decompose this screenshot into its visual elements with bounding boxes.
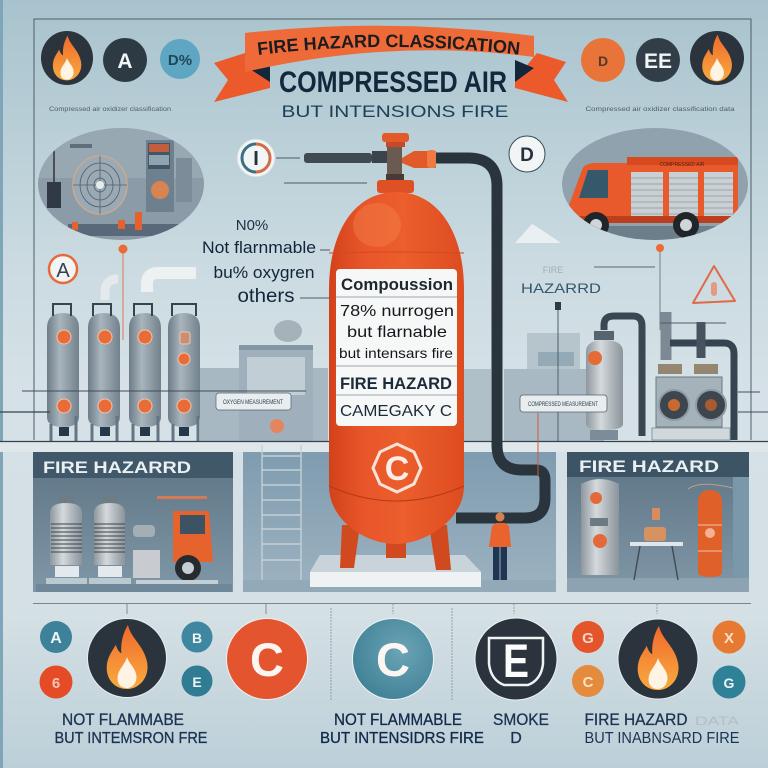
annotation: not flammable: N0% <box>236 217 268 234</box>
caption: fire hazard right: FIRE HAZARD <box>584 711 688 729</box>
small caption left: Compressed air oxidizer classification <box>49 107 171 113</box>
caption: smoke <box>493 711 549 747</box>
caption: not flammable left <box>54 711 208 747</box>
title ribbon: FIRE HAZARD CLASSICATION <box>258 34 520 55</box>
badge: class C teal <box>352 618 434 700</box>
icons: top left class badges: A <box>117 50 133 73</box>
panel: fire hazard room right <box>567 452 749 592</box>
badge: class E <box>475 618 557 700</box>
text: fire hazard annotation: HAZARRD <box>521 280 601 296</box>
legend: group A: 6 <box>52 675 60 692</box>
legend: group right: X <box>724 630 734 647</box>
composition label: but flarnable <box>347 324 447 341</box>
badge: I <box>237 139 275 177</box>
legend: group A: E <box>192 674 202 690</box>
badge: class E: E <box>503 634 529 687</box>
legend: group A: A <box>50 630 62 647</box>
icon: warning triangle <box>693 266 735 303</box>
legend: group right: C <box>583 674 594 691</box>
annotation: not flammable: bu% oxygren <box>214 263 314 282</box>
title: COMPRESSED AIR <box>279 66 507 99</box>
legend: group right <box>572 619 746 699</box>
panel: cylinder bank left: OXYGEN MEASUREMENT <box>223 400 283 406</box>
panel: compressor machinery right <box>464 244 768 442</box>
panel: centre bay with ladder <box>243 445 556 592</box>
composition label <box>336 269 457 426</box>
badge: D <box>509 136 545 172</box>
badge: class C orange: C <box>250 633 284 686</box>
person <box>489 512 511 580</box>
caption: fire hazard right: DATA <box>695 714 739 728</box>
text: fire hazard annotation: FIRE <box>543 265 563 275</box>
panel: machinery illustration <box>38 128 204 240</box>
legend: group A: B <box>192 630 202 646</box>
caption: not flammable left: BUT INTEMSRON FRE <box>54 730 208 747</box>
icons: top right class badges: EE <box>644 50 672 73</box>
subtitle: BUT INTENSIONS FIRE <box>282 102 508 121</box>
panel: fire hazard room left: FIRE HAZARRD <box>43 458 191 477</box>
caption: not flammable centre: BUT INTENSIDRS FIRE <box>320 730 484 747</box>
annotation: not flammable: Not flarnmable <box>202 238 316 257</box>
caption: smoke: SMOKE <box>493 711 549 729</box>
composition label: FIRE HAZARD <box>340 374 452 393</box>
composition label: but intensars fire <box>339 345 453 361</box>
panel: fire truck illustration: COMPRESSED AIR <box>659 162 705 168</box>
badge: D: D <box>520 145 534 166</box>
caption: smoke: D <box>510 730 522 747</box>
legend: group right: G <box>582 630 594 647</box>
composition label: 78% nurrogen <box>340 303 454 320</box>
base plate <box>310 525 481 587</box>
class C emblem: C <box>385 450 409 488</box>
badge: class C orange <box>226 618 308 700</box>
annotation: not flammable <box>202 217 336 307</box>
pipe and valve <box>276 133 545 518</box>
icons: top right class badges: D <box>598 53 608 69</box>
icons: top left class badges: D% <box>168 52 192 69</box>
title ribbon <box>214 26 568 121</box>
caption: fire hazard right: BUT INABNSARD FIRE <box>584 730 740 747</box>
divider lines <box>33 604 751 614</box>
icons: top right class badges <box>581 31 744 85</box>
panel: fire hazard room right: FIRE HAZARD <box>579 457 719 476</box>
panel: fire truck illustration <box>562 128 748 240</box>
composition label: CAMEGAKY C <box>340 403 452 420</box>
caption: not flammable centre: NOT FLAMMABLE <box>334 711 462 729</box>
caption: fire hazard right <box>584 711 740 747</box>
legend: group right: G <box>724 675 735 691</box>
annotation: not flammable: others <box>238 286 294 307</box>
badge: I: I <box>253 148 259 170</box>
panel: cylinder bank left <box>0 244 328 442</box>
composition label: Compoussion <box>341 275 453 294</box>
class C emblem <box>373 444 421 492</box>
panel: fire hazard room left <box>33 452 233 592</box>
caption: not flammable left: NOT FLAMMABE <box>62 711 184 729</box>
panel: compressor machinery right: COMPRESSED MEASUREMENT <box>528 402 598 408</box>
text: fire hazard annotation <box>521 265 655 296</box>
mountain icon <box>515 224 561 243</box>
small caption right: Compressed air oxidizer classification data <box>586 107 735 113</box>
panel: cylinder bank left: A <box>56 260 70 282</box>
caption: not flammable centre <box>320 711 484 747</box>
main cylinder <box>329 192 464 544</box>
badge: class C teal: C <box>376 633 410 686</box>
legend: group A <box>40 618 212 698</box>
icons: top left class badges <box>41 31 200 85</box>
